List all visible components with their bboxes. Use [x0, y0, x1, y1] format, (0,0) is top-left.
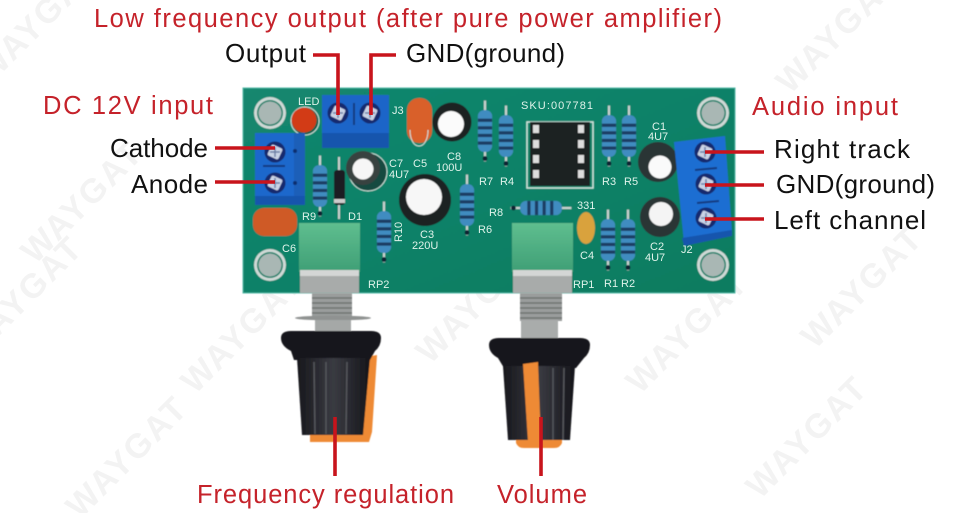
capacitor C6	[253, 208, 297, 236]
label: left channel: Left channel	[774, 205, 926, 235]
capacitor C2	[640, 197, 680, 237]
terminal J1	[255, 133, 305, 205]
silkscreen labels: C5	[413, 158, 427, 170]
capacitor C8	[432, 102, 472, 142]
silkscreen labels	[282, 96, 693, 291]
silkscreen labels: R9	[302, 211, 316, 223]
label: volume: Volume	[497, 481, 587, 509]
heading: DC input: DC 12V input	[43, 92, 213, 120]
silkscreen labels: C8	[447, 151, 461, 163]
silkscreen labels: 4U7	[645, 252, 665, 264]
label: anode: Anode	[131, 169, 208, 199]
mounting holes	[254, 97, 729, 281]
capacitor C4	[577, 212, 595, 244]
terminal J2	[674, 136, 732, 246]
diode D1	[334, 157, 345, 219]
potentiometer RP2	[299, 223, 360, 293]
silkscreen labels: C7	[389, 158, 403, 170]
watermark pattern: WAYGAT	[739, 369, 876, 506]
knob: volume	[489, 293, 590, 448]
silkscreen labels: J2	[681, 244, 693, 256]
capacitor C7	[346, 151, 387, 191]
capacitor C5	[407, 98, 432, 146]
silkscreen labels: R5	[624, 176, 638, 188]
silkscreen labels: R1	[604, 278, 618, 290]
label: output: Output	[225, 38, 307, 68]
silkscreen labels: C2	[650, 241, 664, 253]
silkscreen labels: R8	[489, 207, 503, 219]
silkscreen labels: D1	[348, 211, 362, 223]
leader lines	[215, 55, 764, 476]
resistors	[313, 101, 636, 270]
knob: frequency	[281, 293, 381, 442]
silkscreen labels: J3	[392, 105, 404, 117]
PCB substrate	[243, 88, 735, 293]
silkscreen labels: LED	[298, 96, 319, 108]
silkscreen labels: 4U7	[389, 169, 409, 181]
watermark pattern: WAYGAT	[174, 264, 311, 401]
silkscreen labels: R10	[393, 222, 405, 242]
terminal J3	[322, 95, 389, 148]
silkscreen labels: SKU:007781	[521, 100, 593, 112]
watermark pattern: WAYGAT	[14, 134, 151, 271]
silkscreen labels: 100U	[436, 162, 462, 174]
label: right track: Right track	[774, 134, 911, 164]
silkscreen labels: R4	[500, 176, 514, 188]
silkscreen labels: C3	[420, 229, 434, 241]
silkscreen labels: R2	[621, 278, 635, 290]
silkscreen labels: 220U	[412, 240, 438, 252]
label: cathode: Cathode	[110, 133, 208, 163]
watermark pattern: WAYGAT	[619, 264, 756, 401]
silkscreen labels: RP1	[573, 279, 594, 291]
heading: low frequency output: Low frequency output (after pure power amplifier)	[94, 5, 722, 33]
silkscreen labels: R7	[479, 176, 493, 188]
watermark pattern: WAYGAT	[409, 234, 546, 371]
silkscreen labels: R3	[602, 176, 616, 188]
silkscreen labels: RP2	[368, 279, 389, 291]
silkscreen labels: C4	[580, 250, 594, 262]
silkscreen labels: R6	[478, 224, 492, 236]
heading: audio input: Audio input	[752, 93, 898, 121]
silkscreen labels: 331	[577, 200, 595, 212]
label: top ground: GND(ground)	[406, 38, 565, 68]
silkscreen labels: C1	[652, 121, 666, 133]
capacitor C3	[399, 174, 451, 226]
LED	[291, 107, 319, 135]
label: frequency regulation: Frequency regulation	[197, 481, 454, 509]
silkscreen labels: C6	[282, 243, 296, 255]
chip socket	[527, 122, 593, 188]
watermark pattern: WAYGAT	[794, 219, 931, 356]
panel: circuit board	[243, 88, 735, 293]
silkscreen labels: 4U7	[648, 131, 668, 143]
label: audio ground: GND(ground)	[776, 169, 935, 199]
capacitor C1	[638, 142, 678, 182]
potentiometer RP1	[512, 223, 573, 293]
